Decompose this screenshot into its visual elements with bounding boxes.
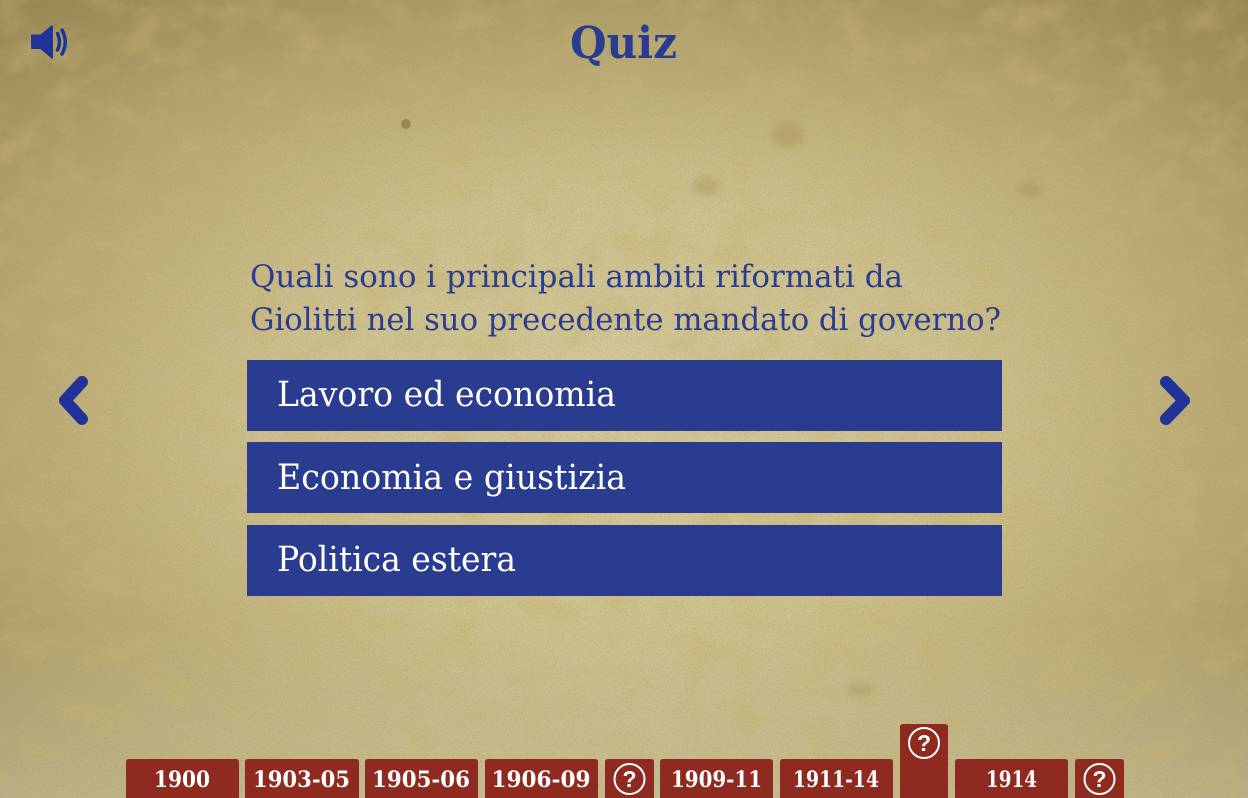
tab: quiz 1: ? <box>622 766 637 792</box>
tab: 1900 <box>126 759 239 798</box>
question text: Giolitti nel suo precedente mandato di governo? <box>250 302 1001 338</box>
tab: 1909-11 <box>660 759 773 798</box>
answer: Economia e giustizia <box>247 442 1002 513</box>
answer: Economia e giustizia: Economia e giustizia <box>277 458 626 498</box>
answer: Lavoro ed economia: Lavoro ed economia <box>277 375 616 415</box>
timeline navigation <box>126 724 1124 798</box>
tab: 1909-11: 1909-11 <box>671 767 762 793</box>
answer: Politica estera <box>247 525 1002 596</box>
tab: 1914 <box>955 759 1068 798</box>
icon: speaker <box>31 25 65 59</box>
tab: 1906-09: 1906-09 <box>492 767 590 793</box>
arrow: previous <box>65 382 82 419</box>
tab: 1905-06 <box>365 759 478 798</box>
tab: quiz 2 active <box>900 724 948 798</box>
tab: 1911-14: 1911-14 <box>793 767 879 793</box>
answer: Politica estera: Politica estera <box>277 540 516 580</box>
tab: quiz 3: ? <box>1092 766 1107 792</box>
tab: 1903-05: 1903-05 <box>253 767 350 793</box>
answer: Lavoro ed economia <box>247 360 1002 431</box>
tab: 1905-06: 1905-06 <box>372 767 470 793</box>
tab: 1906-09 <box>485 759 598 798</box>
tab: 1903-05 <box>245 759 359 798</box>
tab: quiz 1 <box>605 759 654 798</box>
tab: quiz 3 <box>1075 759 1124 798</box>
tab: quiz 2 active: ? <box>917 730 931 756</box>
tab: 1914: 1914 <box>986 767 1037 793</box>
question text <box>250 259 1001 338</box>
tab: 1911-14 <box>780 759 893 798</box>
title: Quiz <box>570 18 677 69</box>
arrow: next <box>1166 382 1184 419</box>
question text: Quali sono i principali ambiti riformati da <box>250 259 903 295</box>
tab: 1900: 1900 <box>154 767 210 793</box>
